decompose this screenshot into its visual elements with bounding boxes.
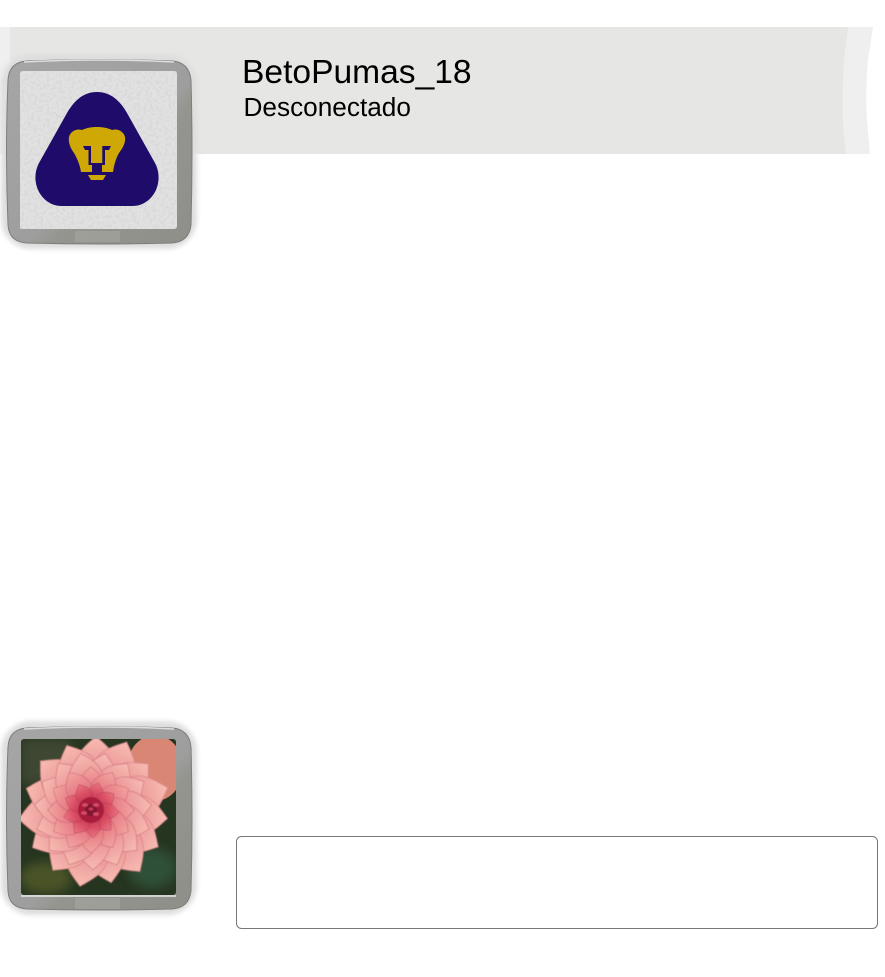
outer petals: [21, 739, 168, 888]
icon: Pumas shield: [35, 92, 159, 206]
third ring: [47, 766, 135, 854]
avatar frame: Pumas logo: [1, 54, 197, 249]
status text: Desconectado: [244, 92, 411, 122]
icon: puma face: [69, 127, 125, 180]
second ring: [32, 750, 154, 872]
flower centre: [78, 797, 104, 823]
message input box: [236, 836, 878, 928]
header banner: [0, 27, 873, 154]
inner ring: [62, 781, 120, 839]
avatar frame: flower photo: [1, 721, 197, 915]
background flower: [130, 739, 176, 800]
photo: pink dahlia: [21, 739, 176, 895]
textured background: [20, 71, 177, 229]
username: BetoPumas_18: [242, 54, 472, 91]
